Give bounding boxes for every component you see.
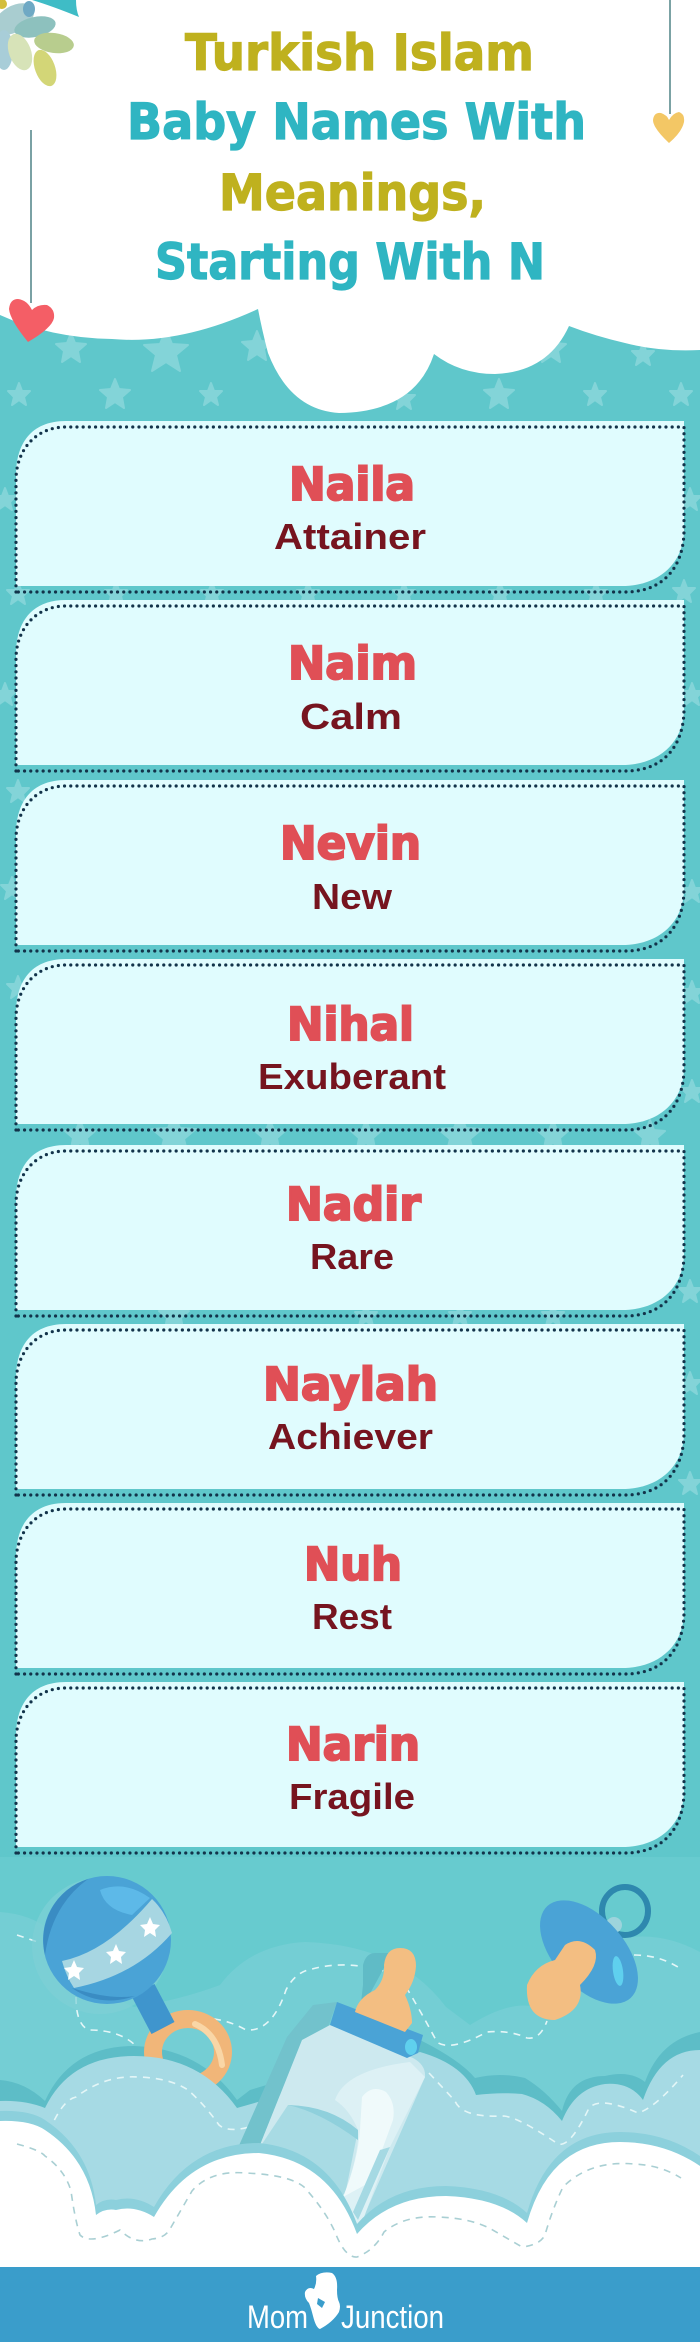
white foreground cloud: [0, 2121, 700, 2267]
white header cloud: [0, 0, 700, 413]
panel: Nadir: Nadir: [286, 1178, 422, 1231]
bottom art background: [0, 1857, 700, 2267]
logo: MomJunction: Junction: [341, 2299, 444, 2335]
panel: Naila: Naila: [289, 458, 415, 511]
logo: MomJunction: Mom: [247, 2299, 308, 2335]
star pattern background: [0, 329, 700, 1494]
left string: [30, 130, 32, 303]
logo: MomJunction: [247, 2272, 444, 2335]
title: Starting With N: [155, 233, 545, 291]
panel: Nuh: Nuh: [304, 1538, 402, 1591]
panel: Nevin: [16, 780, 684, 951]
panel: Nadir: Rare: [310, 1236, 394, 1277]
light cloud: [0, 2050, 700, 2267]
icon: rattle: [32, 1876, 172, 2028]
panel: Naim: [16, 600, 684, 771]
panel: Naila: [16, 421, 684, 592]
icon: yellow heart: [653, 112, 684, 143]
panel: Nihal: Nihal: [287, 998, 414, 1051]
panel: Nuh: Rest: [312, 1596, 392, 1637]
panel: Naylah: Achiever: [268, 1416, 433, 1457]
title: Turkish Islam: [185, 24, 534, 82]
icon: watercolor leaves: [0, 0, 75, 89]
panel: Nevin: Nevin: [280, 817, 421, 870]
panel: Naylah: Naylah: [263, 1358, 438, 1411]
dashed line on white cloud: [17, 2144, 681, 2257]
title: [127, 24, 586, 291]
panel: Naim: Calm: [300, 696, 402, 737]
panel: Naylah: [16, 1324, 684, 1495]
title: Meanings,: [219, 164, 486, 222]
icon: pacifier: [522, 1883, 656, 2021]
panel: Narin: [16, 1682, 684, 1853]
panel: Nadir: [16, 1145, 684, 1316]
rattle ring: [153, 2019, 223, 2085]
back cloud: [0, 1912, 700, 2267]
right string: [669, 0, 671, 114]
darker cloud band: [0, 2032, 700, 2267]
icon: baby bottle: [237, 1948, 425, 2240]
panel: Nihal: [16, 959, 684, 1130]
bunting corner: [32, 0, 79, 17]
dashed line on light cloud: [49, 2073, 683, 2144]
cloud band above white: [0, 2111, 700, 2267]
panel: Nihal: Exuberant: [258, 1056, 446, 1097]
footer bar: [0, 2267, 700, 2342]
panel: Nevin: New: [312, 876, 393, 917]
panel: Naila: Attainer: [274, 516, 426, 557]
panel: Nuh: [16, 1503, 684, 1674]
title: Baby Names With: [127, 93, 586, 151]
panel: Naim: Naim: [288, 637, 417, 690]
panel: Narin: Narin: [286, 1718, 420, 1771]
panel: Narin: Fragile: [289, 1776, 415, 1817]
dashed line upper: [17, 1935, 681, 2046]
icon: red heart: [9, 299, 54, 342]
